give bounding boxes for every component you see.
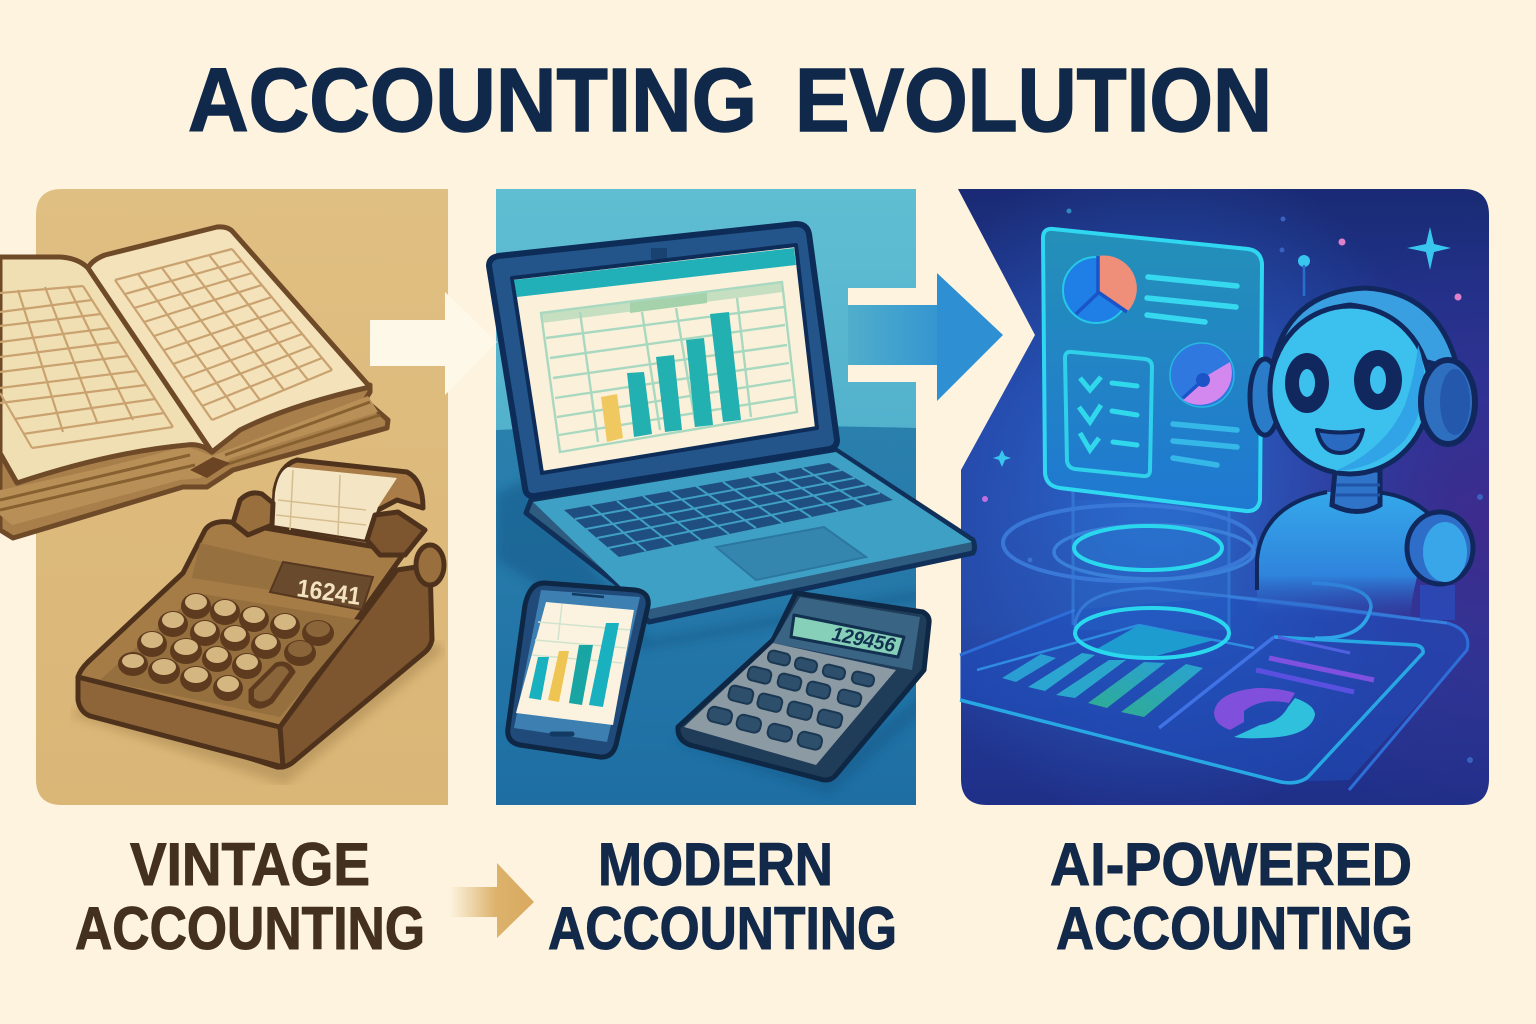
label: modern accounting xyxy=(548,831,897,962)
smile xyxy=(1317,430,1363,453)
right page xyxy=(88,227,370,452)
illustration: mechanical adding machine xyxy=(70,460,445,785)
illustration: laptop xyxy=(489,224,974,650)
bars xyxy=(601,312,741,442)
laptop shadow xyxy=(496,480,920,650)
side knob xyxy=(416,545,444,585)
label: AI-powered accounting: AI-POWERED xyxy=(1050,831,1412,898)
panel: vintage background xyxy=(36,189,448,805)
illustration: robot assistant xyxy=(1250,288,1475,620)
illustration: holographic floor panel xyxy=(960,597,1468,790)
machine top xyxy=(78,522,405,727)
keys xyxy=(118,593,334,707)
pie chart one xyxy=(1063,255,1137,323)
illustration: pocket calculator xyxy=(676,593,945,795)
machine front xyxy=(78,677,283,767)
laptop screen xyxy=(489,224,837,496)
paper roll xyxy=(273,460,423,540)
roller brackets xyxy=(233,493,273,535)
calculator head xyxy=(773,597,920,670)
title: ACCOUNTING xyxy=(188,51,757,151)
calculator keys xyxy=(706,650,875,751)
illustration: smartphone xyxy=(508,583,648,757)
arm support xyxy=(1420,585,1455,620)
title: EVOLUTION xyxy=(795,51,1272,151)
checklist xyxy=(1065,352,1152,476)
display xyxy=(270,562,373,610)
illustration: holographic dashboard card xyxy=(1043,229,1262,511)
neck xyxy=(1332,470,1380,512)
label: vintage accounting xyxy=(75,831,425,962)
right headphone xyxy=(1421,360,1475,444)
floor report lines xyxy=(1269,658,1374,680)
machine right side xyxy=(240,565,432,767)
label: vintage accounting: ACCOUNTING xyxy=(75,895,425,962)
label: modern accounting: ACCOUNTING xyxy=(548,895,897,962)
floor bars xyxy=(1002,653,1203,717)
label: AI-powered accounting xyxy=(1050,831,1413,962)
arrow: vintage to modern xyxy=(370,292,497,395)
left page xyxy=(0,257,212,483)
arrow: label arrow xyxy=(450,863,534,938)
head xyxy=(1270,306,1430,474)
decorative sparkles xyxy=(982,208,1483,763)
donut chart xyxy=(1170,343,1234,407)
headband xyxy=(1272,288,1458,370)
left ear xyxy=(1250,359,1280,435)
display number: 16241 xyxy=(295,574,363,611)
label: AI-powered accounting: ACCOUNTING xyxy=(1056,895,1413,962)
eyes xyxy=(1285,353,1329,413)
laptop base xyxy=(526,450,974,622)
label: modern accounting: MODERN xyxy=(598,831,833,898)
illustration: open ledger book xyxy=(0,227,388,538)
trackpad xyxy=(716,527,866,580)
title xyxy=(188,51,1272,151)
floor donut xyxy=(1214,688,1315,738)
machine shadow xyxy=(70,640,445,785)
calculator display xyxy=(791,615,904,657)
panel: modern background xyxy=(496,189,916,805)
spreadsheet xyxy=(541,282,797,452)
illustration: hologram rings xyxy=(1003,490,1447,658)
calculator number: 129456 xyxy=(830,623,898,657)
label: vintage accounting: VINTAGE xyxy=(130,831,370,898)
left page grid xyxy=(0,286,173,448)
right page grid xyxy=(115,249,332,420)
body xyxy=(1257,492,1430,620)
arm xyxy=(1407,512,1473,584)
arrow: modern to AI xyxy=(848,273,1003,401)
panel: AI background xyxy=(958,189,1489,805)
calculator face xyxy=(684,643,896,765)
keyboard xyxy=(564,463,893,557)
